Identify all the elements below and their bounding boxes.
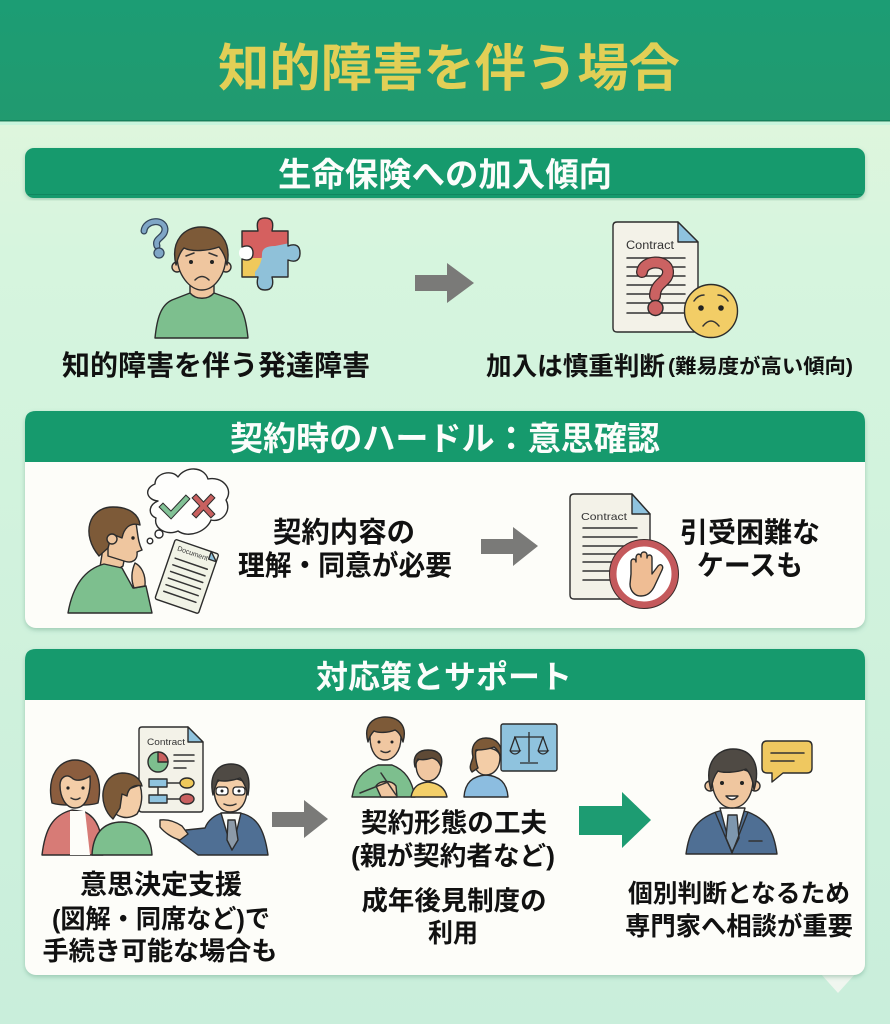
- section 1 heading text: 生命保険への加入傾向: [278, 156, 612, 193]
- text: understanding and consent: 理解・同意が必要: [238, 549, 452, 581]
- icon: worried person with question mark and puzzle: [144, 218, 305, 338]
- text: decision support: 手続き可能な場合も: [42, 936, 278, 966]
- scale card: [501, 724, 557, 771]
- panel 2 heading: 契約時のハードル：意思確認: [230, 420, 660, 457]
- text: hard to underwrite: [680, 517, 820, 581]
- icon: contract with stop hand: Contract: [581, 511, 627, 523]
- icon: contract with question mark and sad face: [613, 222, 738, 338]
- icon: expert with speech bubble: [686, 741, 812, 854]
- text: understanding and consent: [238, 517, 452, 581]
- red question mark: [642, 262, 668, 316]
- contract with charts: [139, 727, 203, 812]
- text: decision support: [42, 870, 278, 966]
- arrow: grey 1: [415, 263, 474, 303]
- person: [155, 227, 248, 338]
- text: understanding and consent: 契約内容の: [273, 517, 415, 549]
- header band: [0, 0, 890, 125]
- document: Contract: [626, 240, 675, 252]
- icon: question mark: [144, 222, 165, 258]
- section 1 heading bar: [25, 148, 865, 198]
- icon: person thinking with document: [68, 469, 229, 614]
- father signing: [352, 717, 415, 797]
- text: hard to underwrite: ケースも: [697, 550, 803, 581]
- rotated document: [155, 539, 219, 614]
- text: adult guardianship: 成年後見制度の: [362, 886, 546, 916]
- label: cautious decision: 加入は慎重判断: [486, 353, 665, 381]
- title: 知的障害を伴う場合: [218, 40, 680, 97]
- icon: contract with stop hand: [570, 494, 678, 608]
- text: consult an expert: 専門家へ相談が重要: [625, 912, 853, 941]
- text: decision support: (図解・同席など)で: [52, 904, 270, 934]
- text: decision support: 意思決定支援: [80, 870, 242, 900]
- arrow: grey 2: [481, 527, 538, 566]
- text: contract form: [351, 808, 555, 871]
- icon: family and guardianship scale: [352, 717, 557, 797]
- sad face: [684, 284, 738, 338]
- text: consult an expert: 個別判断となるため: [628, 880, 850, 908]
- child: [411, 750, 447, 797]
- arrow: green: [579, 792, 651, 848]
- text: adult guardianship: 利用: [428, 918, 478, 948]
- thought cloud: [147, 469, 229, 544]
- panel: contract hurdle: [25, 411, 865, 628]
- speech tail: [820, 973, 856, 993]
- contract with charts: Contract: [147, 737, 186, 747]
- rotated document: Document: [176, 546, 209, 563]
- text: contract form: (親が契約者など): [351, 841, 555, 871]
- man from behind: [92, 773, 152, 855]
- speech bubble: [762, 741, 812, 782]
- label: cautious decision: (難易度が高い傾向): [668, 354, 853, 378]
- woman: [464, 738, 508, 797]
- text: adult guardianship: [362, 886, 546, 948]
- panel 3 heading: 対応策とサポート: [316, 659, 572, 695]
- expert: [686, 749, 777, 854]
- label: cautious decision: [486, 353, 853, 381]
- text: contract form: 契約形態の工夫: [361, 808, 547, 838]
- advisor: [160, 764, 268, 855]
- woman: [42, 760, 103, 855]
- icon: stop sign: [610, 540, 678, 608]
- thinking person: [68, 507, 152, 613]
- text: consult an expert: [625, 880, 853, 941]
- text: hard to underwrite: 引受困難な: [680, 517, 820, 548]
- label: intellectual-disability developmental disorder: 知的障害を伴う発達障害: [62, 350, 370, 381]
- icon: puzzle piece: [239, 218, 305, 295]
- icon: decision support meeting: [42, 727, 268, 855]
- arrow: grey 3: [272, 800, 328, 838]
- panel: responses and support: [25, 649, 865, 993]
